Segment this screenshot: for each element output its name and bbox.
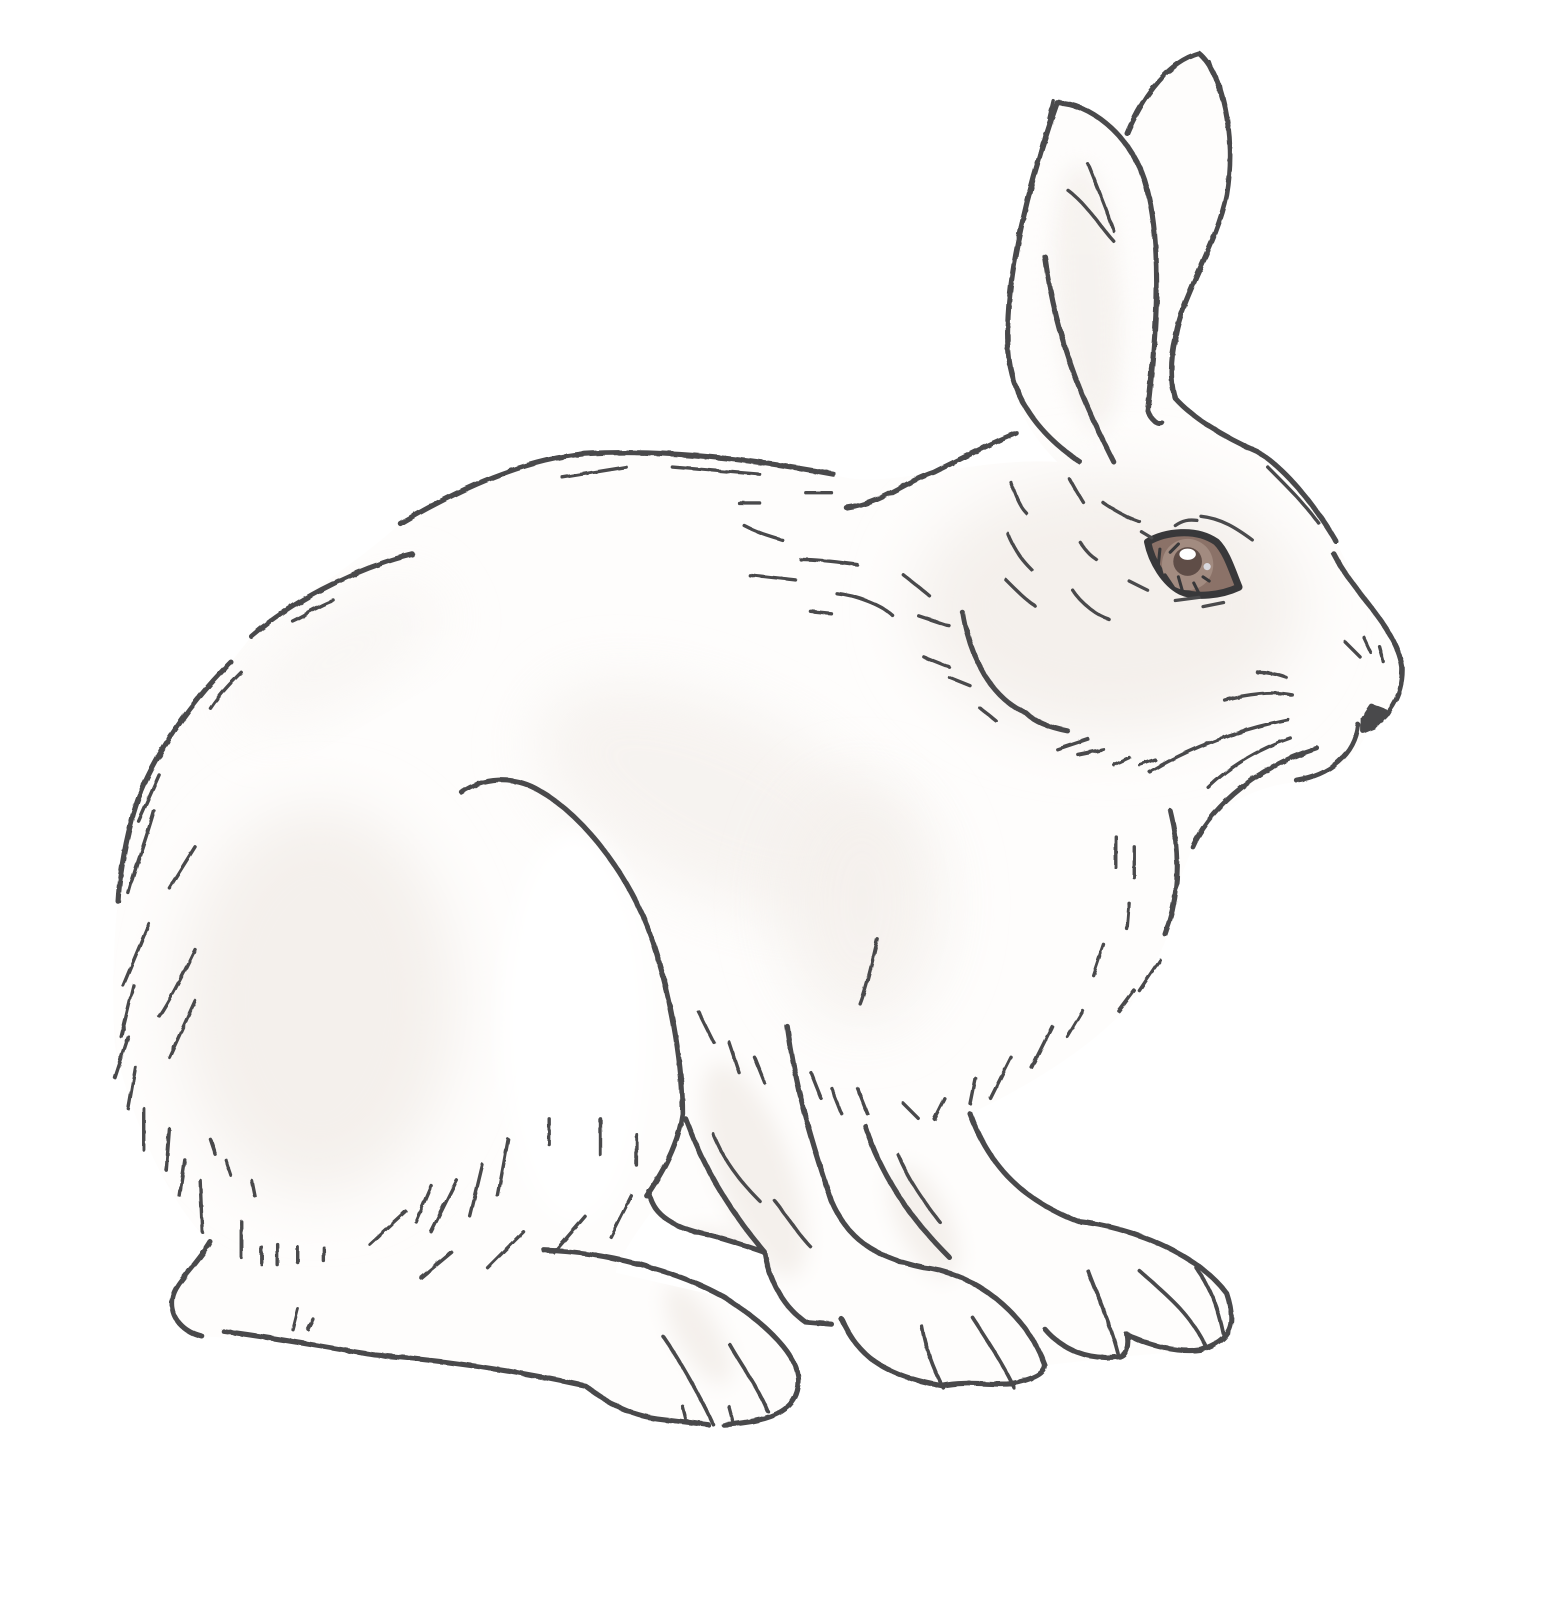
head and nose — [1175, 398, 1402, 780]
near front leg — [686, 1026, 1045, 1386]
rear foot — [172, 1242, 799, 1425]
leg fur — [293, 1134, 939, 1422]
back ear — [1127, 53, 1230, 423]
chest and belly fur — [698, 837, 1160, 1119]
icon: eye — [1129, 516, 1252, 607]
neck fur — [739, 493, 1155, 765]
body fill — [167, 166, 1313, 1385]
chin and chest — [1165, 748, 1317, 934]
outline strokes — [118, 53, 1402, 1425]
whiskers — [1150, 672, 1292, 787]
fur hatching — [115, 62, 1384, 1422]
illustration: white hare in profile — [112, 50, 1405, 1428]
back line — [118, 453, 834, 901]
far rear foot — [649, 1191, 831, 1324]
neck — [847, 433, 1068, 731]
ear and head detail — [1006, 62, 1384, 662]
white rear-leg highlight — [503, 831, 647, 1221]
far front leg — [865, 1114, 1231, 1358]
haunch — [462, 780, 683, 1196]
back fur — [128, 467, 760, 893]
rear fur — [115, 924, 636, 1278]
front ear — [1008, 103, 1157, 462]
